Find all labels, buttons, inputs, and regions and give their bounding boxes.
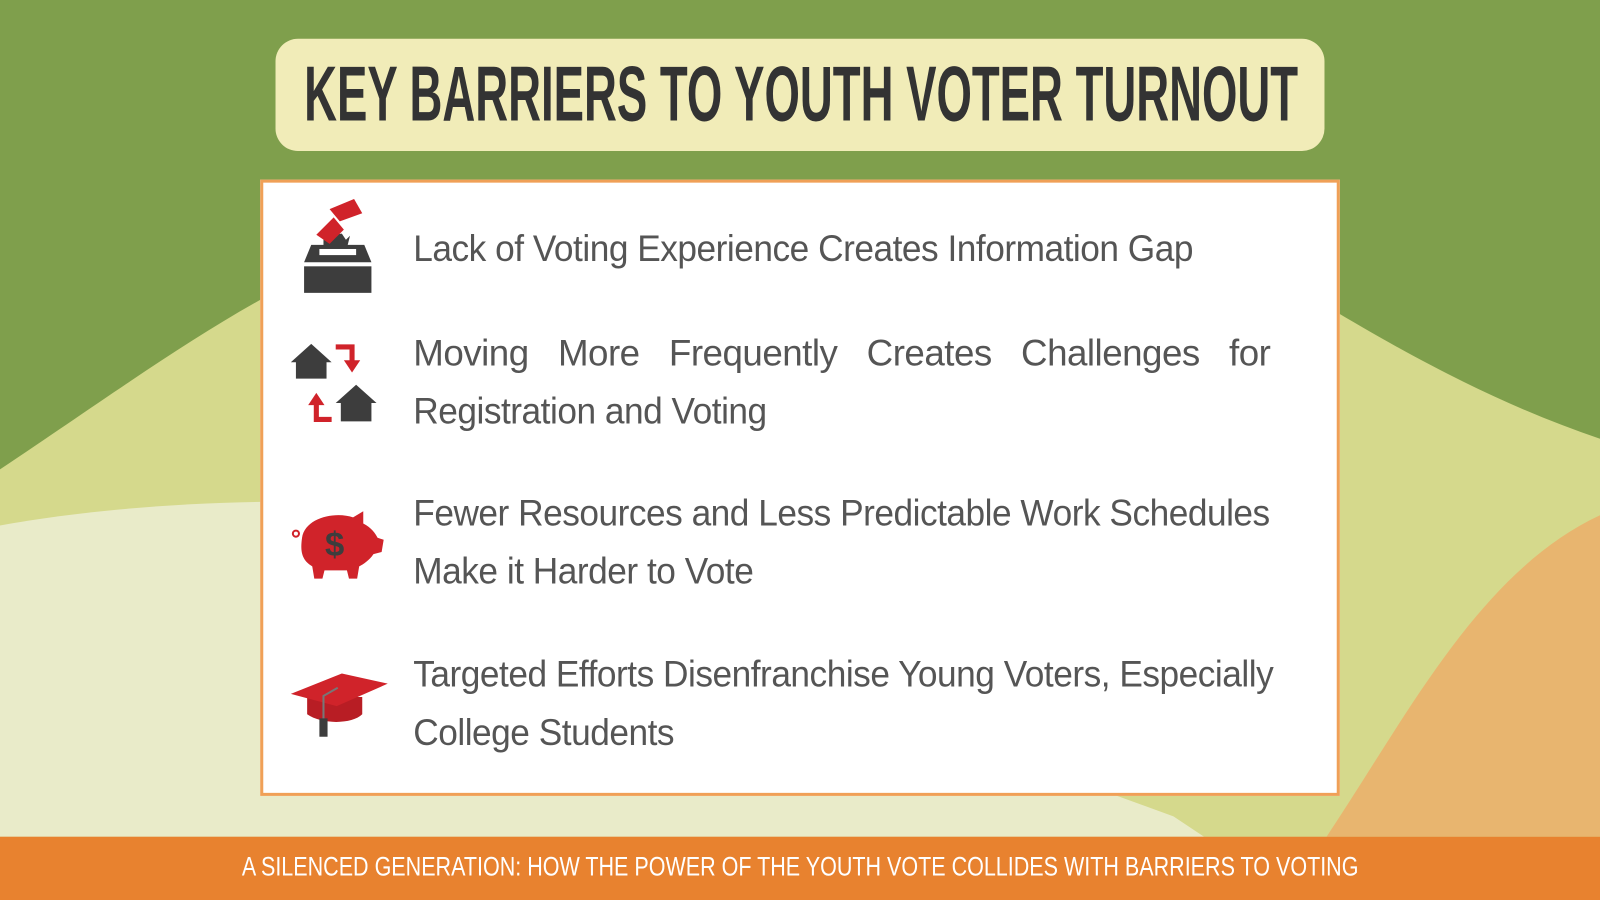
text: barrier 4 (413, 653, 1274, 753)
text: barrier 2: Creates (867, 332, 992, 373)
text: barrier 2: for (1229, 332, 1270, 373)
panel: barriers (260, 180, 1340, 796)
text: barrier 4: Targeted Efforts Disenfranchise Young Voters, Especially (413, 653, 1273, 695)
text: barrier 1: Lack of Voting Experience Creates Information Gap (413, 228, 1193, 269)
title: KEY BARRIERS TO YOUTH VOTER TURNOUT (304, 51, 1298, 138)
text: barrier 2: More (558, 332, 640, 373)
icon: ballot box (304, 199, 372, 293)
icon: piggy bank (292, 511, 384, 579)
text: barrier 3: Make it Harder to Vote (413, 550, 753, 592)
icon: graduation cap (291, 674, 388, 737)
text: barrier 2: Frequently (669, 332, 837, 373)
text: barrier 2: Registration and Voting (413, 390, 767, 432)
icon: moving houses (291, 344, 376, 422)
text: barrier 2 (413, 332, 1270, 432)
text: barrier 3 (413, 492, 1270, 592)
text: barrier 2: Moving (413, 332, 529, 373)
text: barrier 2: Challenges (1021, 332, 1200, 373)
icon: piggy bank: $ (325, 526, 344, 564)
footer banner: A SILENCED GENERATION: HOW THE POWER OF THE YOUTH VOTE COLLIDES WITH BARRIERS TO VOTING (242, 851, 1358, 882)
footer banner (0, 837, 1600, 900)
text: barrier 3: Fewer Resources and Less Predictable Work Schedules (413, 492, 1270, 534)
text: barrier 4: College Students (413, 711, 674, 753)
